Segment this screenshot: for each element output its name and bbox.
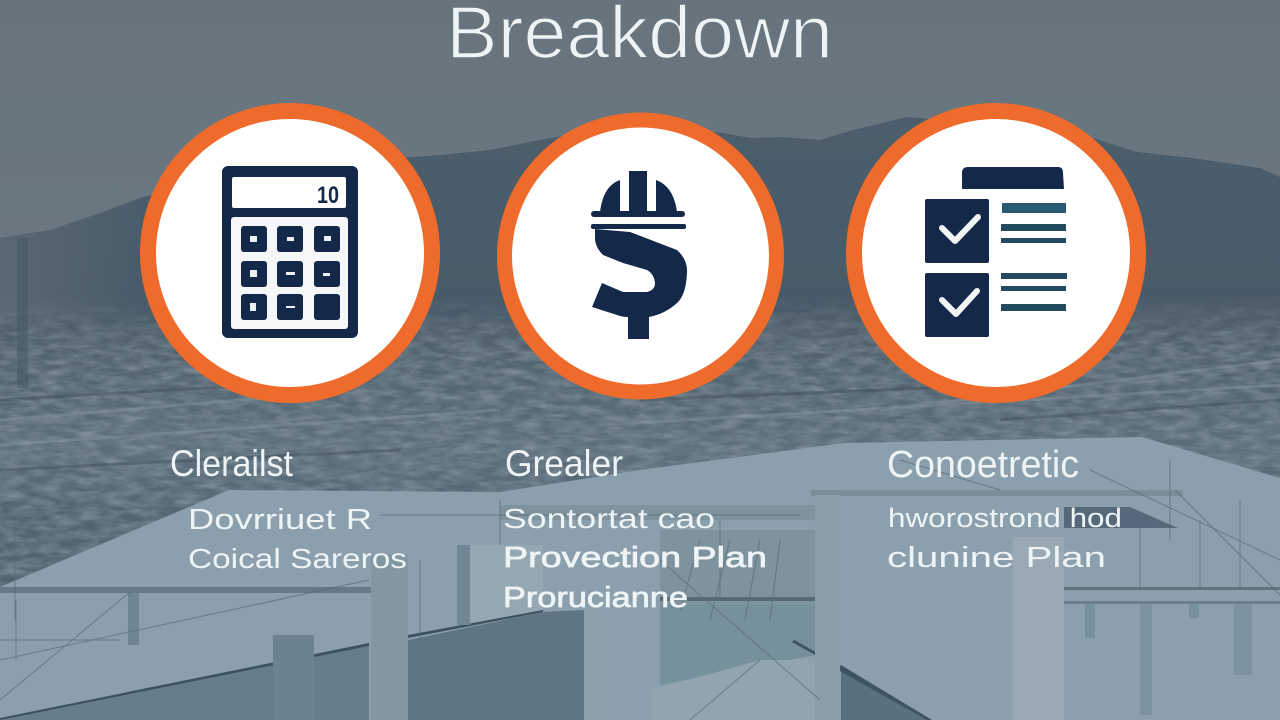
column 3 text bbox=[887, 444, 1122, 574]
column 2 text: Sontortat cao bbox=[503, 503, 715, 534]
column 1 text: Clerailst bbox=[170, 443, 294, 484]
column 1 text bbox=[170, 443, 407, 574]
column 3 text: clunine Plan bbox=[887, 542, 1106, 574]
column 2 text: Prorucianne bbox=[503, 582, 688, 614]
column 2 text bbox=[503, 443, 767, 614]
column 3 text: Conoetretic bbox=[887, 444, 1079, 486]
concrete slab bbox=[0, 437, 1280, 720]
column 2 text: Provection Plan bbox=[503, 542, 767, 574]
circle icon: checklist bbox=[854, 111, 1138, 395]
column 2 text: Grealer bbox=[505, 443, 623, 484]
column 1 text: Dovrriuet R bbox=[188, 504, 372, 536]
circle icon: hard hat dollar bbox=[504, 120, 776, 392]
circle icon: calculator bbox=[148, 111, 432, 395]
column 3 text: hworostrond hod bbox=[888, 503, 1122, 533]
column 1 text: Coical Sareros bbox=[188, 543, 407, 574]
circle icon: calculator: 10 bbox=[317, 182, 339, 209]
